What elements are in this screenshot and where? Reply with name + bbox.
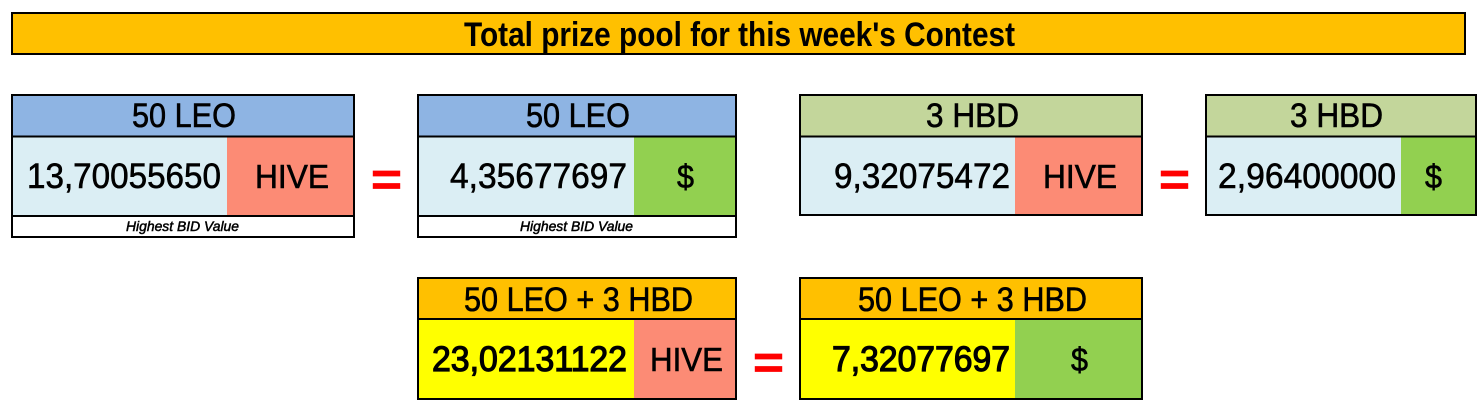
panel: 3 HBD in dollars bbox=[1206, 95, 1476, 215]
equals sign: = bbox=[1159, 153, 1190, 205]
panel: 3 HBD in dollars: $ bbox=[1425, 158, 1442, 195]
panel: 3 HBD in dollars: 3 HBD bbox=[1290, 97, 1383, 135]
panel: 3 HBD in dollars: 2,96400000 bbox=[1218, 157, 1396, 196]
panel: 50 LEO in HIVE: Highest BID Value bbox=[126, 218, 239, 234]
panel: combined total in dollars: 50 LEO + 3 HBD bbox=[858, 281, 1087, 319]
panel: 50 LEO in dollars: 50 LEO bbox=[526, 97, 630, 135]
panel: 50 LEO in dollars: $ bbox=[677, 158, 694, 195]
panel: 50 LEO in dollars bbox=[418, 95, 736, 237]
panel: 50 LEO in HIVE: 13,70055650 bbox=[27, 157, 221, 196]
panel: 50 LEO in HIVE bbox=[12, 95, 354, 237]
panel: 50 LEO in HIVE: 50 LEO bbox=[132, 97, 236, 135]
panel: combined total in HIVE bbox=[418, 278, 736, 399]
equals sign: = bbox=[753, 336, 784, 388]
title banner bbox=[12, 13, 1465, 54]
equals sign: = bbox=[371, 153, 402, 205]
panel: 50 LEO in dollars: Highest BID Value bbox=[520, 218, 633, 234]
panel: 3 HBD in HIVE: 9,32075472 bbox=[834, 157, 1010, 196]
title banner: Total prize pool for this week's Contest bbox=[464, 16, 1015, 54]
panel: 3 HBD in HIVE bbox=[800, 95, 1142, 215]
panel: 3 HBD in HIVE: HIVE bbox=[1043, 158, 1117, 195]
panel: combined total in HIVE: 23,02131122 bbox=[432, 340, 627, 379]
panel: combined total in dollars: $ bbox=[1071, 341, 1088, 378]
panel: 3 HBD in HIVE: 3 HBD bbox=[926, 97, 1019, 135]
panel: 50 LEO in HIVE: HIVE bbox=[255, 158, 329, 195]
panel: combined total in HIVE: 50 LEO + 3 HBD bbox=[464, 281, 693, 319]
panel: combined total in HIVE: HIVE bbox=[650, 341, 723, 378]
panel: 50 LEO in dollars: 4,35677697 bbox=[450, 157, 627, 196]
panel: combined total in dollars: 7,32077697 bbox=[832, 340, 1010, 379]
panel: combined total in dollars bbox=[800, 278, 1142, 399]
